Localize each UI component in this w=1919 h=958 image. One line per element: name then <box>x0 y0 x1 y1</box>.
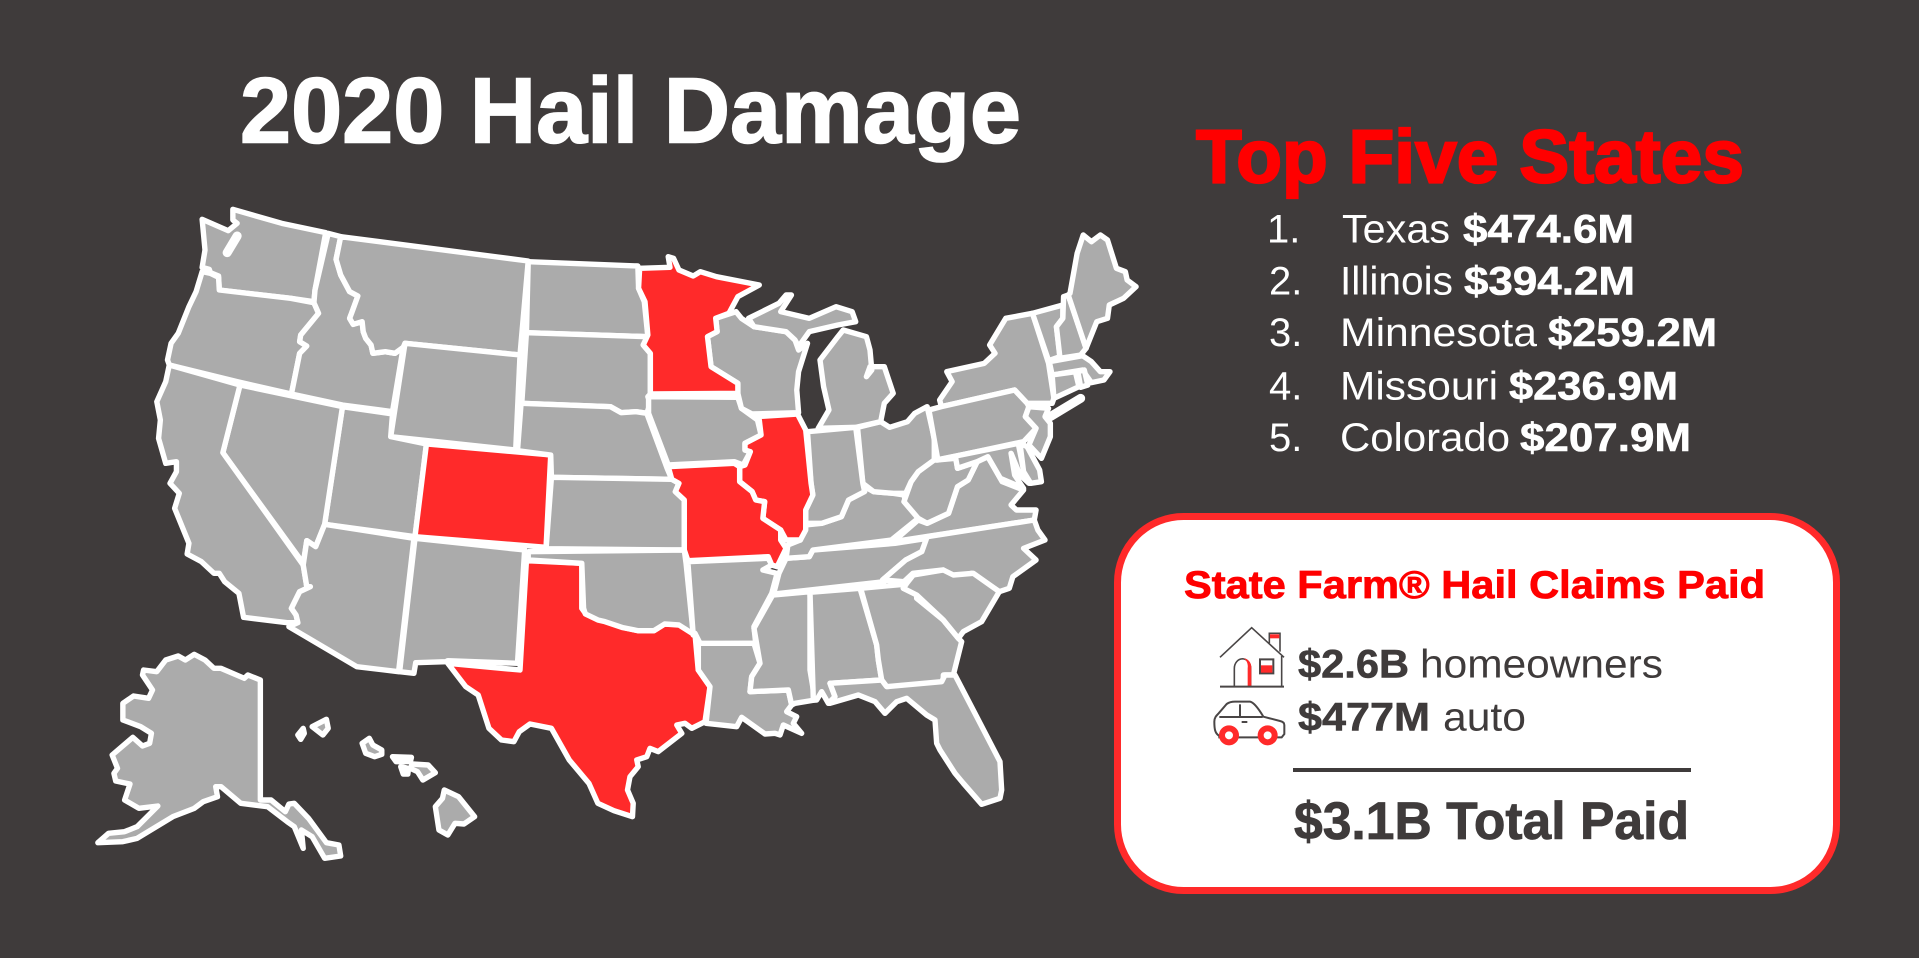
rank 2: Illinois: 2. <box>1269 259 1302 303</box>
island: Molokai <box>392 757 411 762</box>
state: New York <box>940 313 1054 407</box>
state: Maine <box>1068 235 1136 348</box>
state: Missouri (highlighted) <box>668 463 786 567</box>
panel: State Farm hail claims paid <box>1118 516 1836 890</box>
state: Michigan upper peninsula <box>749 295 856 347</box>
southeastern states <box>698 570 1002 804</box>
text: homeowners amount <box>1298 642 1663 686</box>
Long Island <box>1050 398 1081 417</box>
state: Vermont <box>1032 305 1063 361</box>
panel heading: State Farm® Hail Claims Paid <box>1184 564 1765 607</box>
state: Virginia <box>893 457 1036 542</box>
text: homeowners amount: homeowners <box>1420 642 1663 686</box>
icon: house <box>1220 628 1284 687</box>
state: Nebraska <box>518 403 672 479</box>
central and eastern states <box>518 235 1136 644</box>
state: Georgia <box>861 584 962 687</box>
rank 3: Minnesota: Minnesota <box>1340 311 1538 355</box>
island: Maui <box>410 764 435 780</box>
state: Pennsylvania <box>929 390 1036 460</box>
state: Maryland <box>936 443 1040 488</box>
title: 2020 Hail Damage <box>240 58 1021 162</box>
Alaska and Hawaii <box>98 654 475 858</box>
island: Oahu <box>362 738 382 757</box>
state: West Virginia <box>904 443 977 523</box>
rank 3: Minnesota: $259.2M <box>1548 311 1717 355</box>
state: Washington <box>202 209 326 302</box>
rank 4: Missouri: Missouri <box>1340 364 1498 408</box>
rank 5: Colorado <box>1269 416 1691 460</box>
rank 2: Illinois: $394.2M <box>1464 259 1635 303</box>
state: Indiana <box>806 427 865 523</box>
rank 5: Colorado: $207.9M <box>1520 416 1691 460</box>
map of the United States <box>98 209 1136 858</box>
state: Rhode Island <box>1078 370 1088 387</box>
ranked list of top five states <box>1267 207 1717 460</box>
text: auto amount: auto <box>1443 696 1526 740</box>
rank 5: Colorado: 5. <box>1269 416 1302 460</box>
rank 1: Texas: $474.6M <box>1463 207 1634 251</box>
island: Kauai <box>312 719 328 735</box>
state: Connecticut <box>1052 372 1079 398</box>
island: Niihau <box>298 728 304 739</box>
state: Minnesota (highlighted) <box>639 257 759 394</box>
state: Colorado (highlighted) <box>415 444 551 547</box>
state: Mississippi <box>750 592 815 705</box>
state: Kentucky <box>786 487 918 558</box>
rank 4: Missouri: 4. <box>1269 364 1302 408</box>
state: California <box>157 365 310 623</box>
rank 2: Illinois: Illinois <box>1340 259 1453 303</box>
state: Oklahoma <box>528 550 693 634</box>
state: Texas (highlighted) <box>448 561 710 817</box>
heading: Top Five States: Top Five States <box>1196 115 1744 199</box>
state: New Hampshire <box>1056 295 1086 358</box>
rank 1: Texas: Texas <box>1342 207 1450 251</box>
state: Louisiana <box>698 643 802 735</box>
rank 2: Illinois <box>1269 259 1635 303</box>
state: Kansas <box>546 477 684 550</box>
rank 3: Minnesota <box>1269 311 1717 355</box>
state: Massachusetts <box>1049 356 1110 383</box>
western states <box>157 209 710 817</box>
state: Ohio <box>857 407 934 493</box>
state: Tennessee <box>774 538 927 594</box>
state: Michigan lower peninsula <box>818 330 893 428</box>
state: Iowa <box>649 397 761 465</box>
state: Alaska <box>98 654 341 858</box>
rank 1: Texas: 1. <box>1267 207 1300 251</box>
rank 4: Missouri: $236.9M <box>1509 364 1678 408</box>
state: Oregon <box>167 272 319 394</box>
state: North Carolina <box>882 520 1045 592</box>
state: Utah <box>325 407 426 537</box>
state: Wisconsin <box>707 312 807 414</box>
state: Nevada <box>223 385 342 563</box>
rank 1: Texas <box>1267 207 1634 251</box>
state: Wyoming <box>391 343 520 450</box>
state: New Mexico <box>400 538 525 673</box>
rank 4: Missouri <box>1269 364 1678 408</box>
state: Idaho <box>291 233 403 412</box>
state: Arizona <box>289 524 414 672</box>
state: New Jersey <box>1025 407 1050 458</box>
state: Alabama <box>810 588 882 703</box>
state: Montana <box>336 237 528 355</box>
state: North Dakota <box>526 262 648 337</box>
state: Florida <box>830 675 1002 804</box>
text: homeowners amount: $2.6B <box>1298 642 1409 686</box>
island: Big Island of Hawaii <box>435 790 475 835</box>
icon: car <box>1214 702 1284 742</box>
state: South Carolina <box>903 570 999 638</box>
state: Delaware <box>1020 443 1041 483</box>
state: Arkansas <box>688 558 777 644</box>
Puget Sound <box>227 236 237 253</box>
total paid: $3.1B Total Paid <box>1294 792 1689 851</box>
island: Lanai <box>401 767 409 774</box>
rank 3: Minnesota: 3. <box>1269 311 1302 355</box>
text: auto amount: $477M <box>1298 696 1430 740</box>
state: Illinois (highlighted) <box>740 414 813 540</box>
state: South Dakota <box>522 333 650 413</box>
text: auto amount <box>1298 696 1526 740</box>
rank 5: Colorado: Colorado <box>1340 416 1510 460</box>
